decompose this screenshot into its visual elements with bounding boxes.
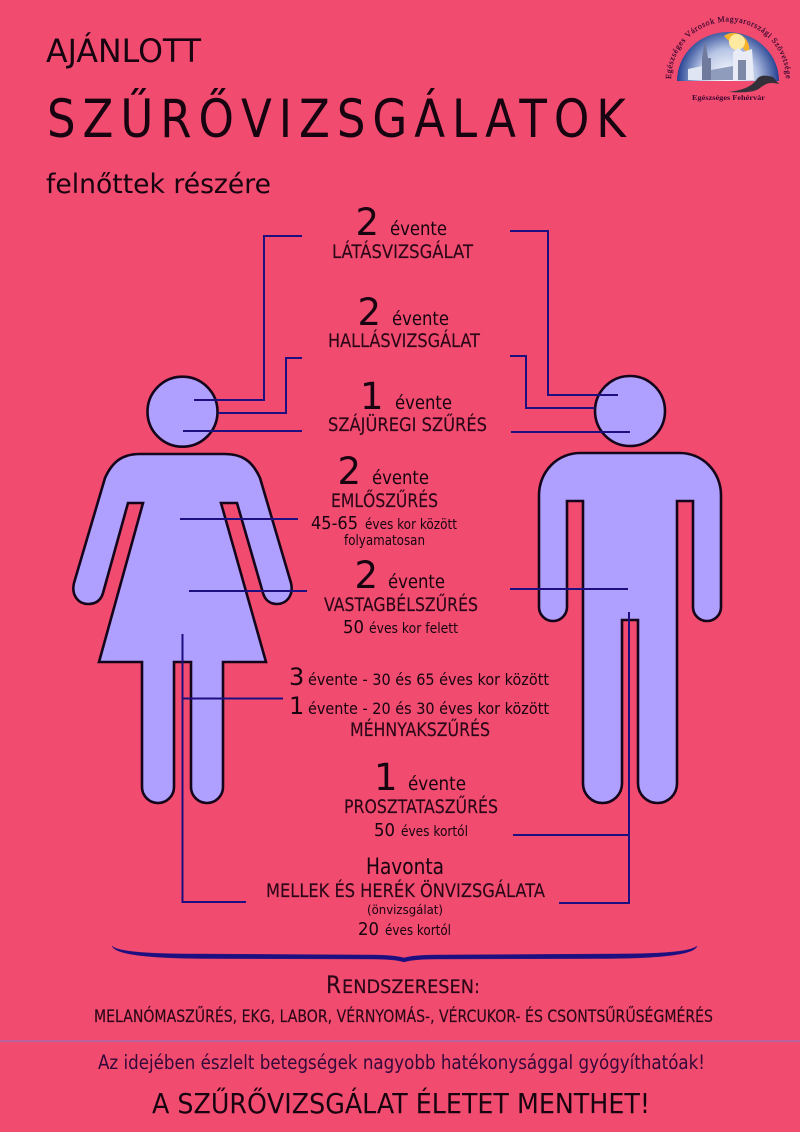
item: prosztataszűrés: éves kortól bbox=[401, 824, 468, 840]
item: vastagbélszűrés bbox=[324, 554, 478, 638]
item: szájüregi szűrés: évente bbox=[395, 392, 452, 414]
logo arc text: Egészséges Városok Magyarországi Szövetsége bbox=[666, 16, 791, 79]
item: mellek és herék önvizsgálata: éves kortól bbox=[385, 923, 451, 939]
regular checks heading bbox=[326, 971, 480, 999]
item: emlőszűrés: éves kor között bbox=[365, 517, 457, 533]
item: látásvizsgálat: évente bbox=[390, 218, 447, 240]
item: vastagbélszűrés: VASTAGBÉLSZŰRÉS bbox=[324, 592, 478, 616]
brace bbox=[112, 946, 697, 962]
item: méhnyakszűrés bbox=[289, 663, 549, 741]
connector lines bbox=[180, 231, 630, 903]
item: szájüregi szűrés: SZÁJÜREGI SZŰRÉS bbox=[328, 412, 487, 436]
item: hallásvizsgálat: HALLÁSVIZSGÁLAT bbox=[328, 329, 480, 352]
item: prosztataszűrés: 50 bbox=[374, 820, 395, 841]
logo road bbox=[728, 76, 779, 92]
item: méhnyakszűrés: 3 bbox=[289, 663, 304, 691]
regular checks heading: R bbox=[326, 971, 341, 999]
item: szájüregi szűrés bbox=[328, 375, 487, 436]
item: vastagbélszűrés: éves kor felett bbox=[369, 621, 458, 637]
female body bbox=[73, 454, 292, 803]
logo caption: Egészséges Fehérvár bbox=[692, 94, 765, 102]
item: prosztataszűrés: évente bbox=[408, 773, 466, 795]
item: mellek és herék önvizsgálata: MELLEK ÉS HERÉK ÖNVIZSGÁLATA bbox=[266, 879, 545, 902]
item: mellek és herék önvizsgálata: 20 bbox=[358, 919, 379, 940]
closing statement: Az idejében észlelt betegségek nagyobb hatékonysággal gyógyíthatóak! bbox=[98, 1051, 705, 1074]
item: látásvizsgálat: 2 bbox=[356, 201, 379, 244]
item: prosztataszűrés: PROSZTATASZŰRÉS bbox=[344, 794, 498, 818]
item: vastagbélszűrés: évente bbox=[388, 571, 445, 593]
logo sun bbox=[724, 33, 749, 52]
item: méhnyakszűrés: évente - 20 és 30 éves kor között bbox=[308, 699, 549, 718]
main title: SZŰRŐVIZSGÁLATOK bbox=[47, 86, 627, 150]
item: emlőszűrés: évente bbox=[372, 467, 429, 489]
divider bbox=[0, 1040, 800, 1042]
male body bbox=[539, 453, 721, 803]
subtitle: felnőttek részére bbox=[46, 169, 271, 200]
regular checks list: MELANÓMASZŰRÉS, EKG, LABOR, VÉRNYOMÁS-, VÉRCUKOR- ÉS CSONTSŰRŰSÉGMÉRÉS bbox=[94, 1006, 713, 1026]
item: méhnyakszűrés: évente - 30 és 65 éves kor között bbox=[308, 670, 549, 689]
title block bbox=[46, 32, 627, 200]
item: prosztataszűrés bbox=[344, 756, 498, 841]
male head bbox=[595, 376, 665, 446]
item: emlőszűrés: folyamatosan bbox=[344, 533, 425, 549]
item: látásvizsgálat bbox=[332, 201, 473, 263]
item: emlőszűrés bbox=[311, 450, 457, 549]
female head bbox=[148, 377, 218, 447]
title line: AJÁNLOTT: AJÁNLOTT bbox=[46, 32, 201, 70]
item: hallásvizsgálat: évente bbox=[392, 308, 449, 330]
logo: Egészséges Városok Magyarországi Szövetsége bbox=[666, 16, 791, 102]
logo buildings bbox=[688, 40, 754, 80]
item: prosztataszűrés: 1 bbox=[374, 756, 398, 799]
item: méhnyakszűrés: 1 bbox=[289, 692, 304, 720]
item: vastagbélszűrés: 2 bbox=[354, 554, 378, 597]
female figure bbox=[73, 377, 292, 803]
item: emlőszűrés: 2 bbox=[338, 450, 361, 493]
logo dome bbox=[677, 32, 779, 81]
male figure bbox=[539, 376, 721, 803]
closing slogan: A SZŰRŐVIZSGÁLAT ÉLETET MENTHET! bbox=[152, 1086, 650, 1120]
item: szájüregi szűrés: 1 bbox=[360, 375, 384, 418]
item: vastagbélszűrés: 50 bbox=[343, 617, 364, 638]
item: mellek és herék önvizsgálata bbox=[266, 855, 545, 940]
regular checks heading: ENDSZERESEN: bbox=[342, 976, 480, 998]
item: emlőszűrés: 45-65 bbox=[311, 513, 358, 534]
item: hallásvizsgálat: 2 bbox=[358, 291, 381, 334]
item: mellek és herék önvizsgálata: (önvizsgálat) bbox=[367, 902, 443, 917]
item: látásvizsgálat: LÁTÁSVIZSGÁLAT bbox=[332, 240, 473, 263]
item: emlőszűrés: EMLŐSZŰRÉS bbox=[331, 488, 438, 512]
item: méhnyakszűrés: MÉHNYAKSZŰRÉS bbox=[350, 717, 490, 741]
item: hallásvizsgálat bbox=[328, 291, 480, 352]
item: mellek és herék önvizsgálata: Havonta bbox=[366, 855, 444, 880]
